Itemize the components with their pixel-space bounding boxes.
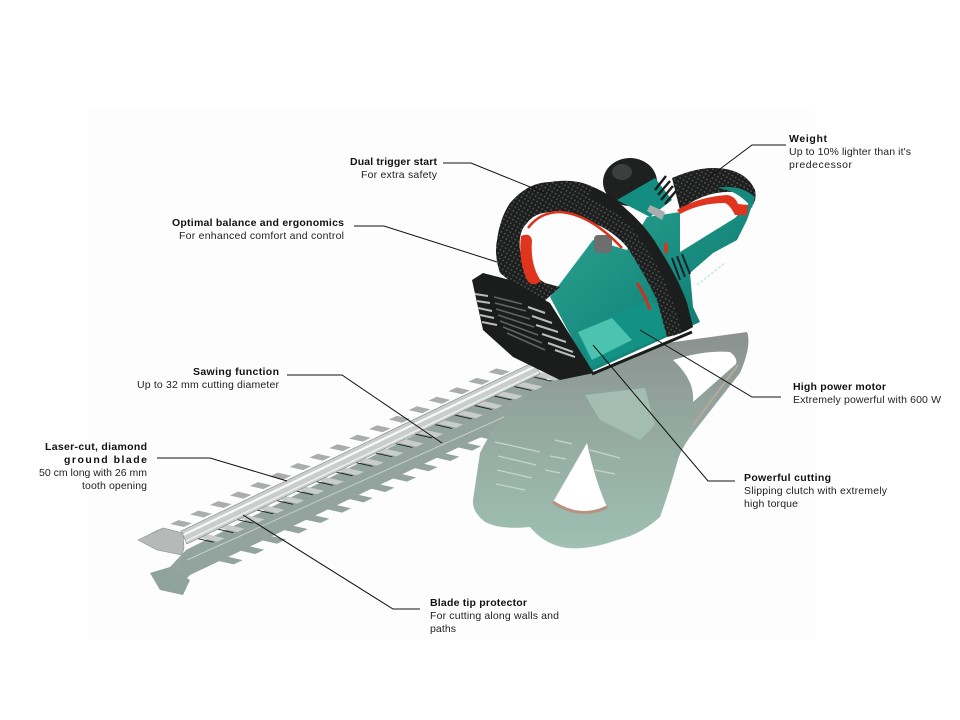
label: powerful cutting: high torque [744,498,798,510]
body: vents [672,254,690,280]
label: blade tip protector: For cutting along walls and [430,610,559,622]
blade [138,362,556,555]
label: weight: predecessor [789,159,852,171]
body: model label [697,263,725,285]
label: high power motor: Extremely powerful with 600 W [793,394,941,406]
rear handle: teal strip [717,187,755,208]
rear handle: red grip [677,195,748,215]
label: sawing function: Up to 32 mm cutting diameter [137,379,280,391]
background panel [88,110,815,640]
label: high power motor: High power motor [793,381,886,393]
body [550,197,755,372]
hand guard: slats [475,294,575,357]
label: laser-cut blade [39,441,147,492]
body: badge [664,243,668,253]
label: weight: Up to 10% lighter than it's [789,146,911,158]
label: optimal balance [172,217,344,242]
label: blade tip protector: paths [430,623,456,635]
label: weight: Weight [789,133,828,145]
label: weight [789,133,911,171]
leader lines [157,145,786,609]
label: blade tip protector: Blade tip protector [430,597,527,609]
blade: teeth [157,363,556,544]
label: powerful cutting: Slipping clutch with extremely [744,485,888,497]
reflection: guard slats [495,440,620,490]
body: base edge [592,332,692,374]
label: dual trigger start [350,156,438,181]
motor dome: ribbed vent [655,176,676,204]
label: laser-cut blade: tooth opening [82,480,147,492]
label: sawing function [137,366,280,391]
label: dual trigger start: For extra safety [361,169,438,181]
front bow handle [496,181,693,337]
label: laser-cut blade: ground blade [64,454,147,466]
reflection: blade [150,372,566,595]
label: dual trigger start: Dual trigger start [350,156,438,168]
label: optimal balance: For enhanced comfort and control [179,230,344,242]
label: optimal balance: Optimal balance and ergonomics [172,217,344,229]
rear handle [672,168,756,215]
reflection: openings [553,443,607,511]
label: sawing function: Sawing function [193,366,279,378]
front handle: red top strip [528,212,622,248]
body: neck collar [594,235,612,253]
blade: tip protector [138,528,184,555]
blade: rod [181,362,540,544]
label: powerful cutting [744,472,888,510]
label: laser-cut blade: Laser-cut, diamond [45,441,147,453]
body: lower housing [580,300,690,368]
motor dome [603,158,676,220]
label: high power motor [793,381,941,406]
front hand guard [472,273,594,380]
reflection of trimmer [150,332,748,595]
label: powerful cutting: Powerful cutting [744,472,831,484]
front handle: red grip [520,235,541,284]
label: blade tip protector [430,597,559,635]
label: laser-cut blade: 50 cm long with 26 mm [39,467,147,479]
reflection: handle and body [473,332,748,548]
motor dome: teal neck [617,178,672,217]
